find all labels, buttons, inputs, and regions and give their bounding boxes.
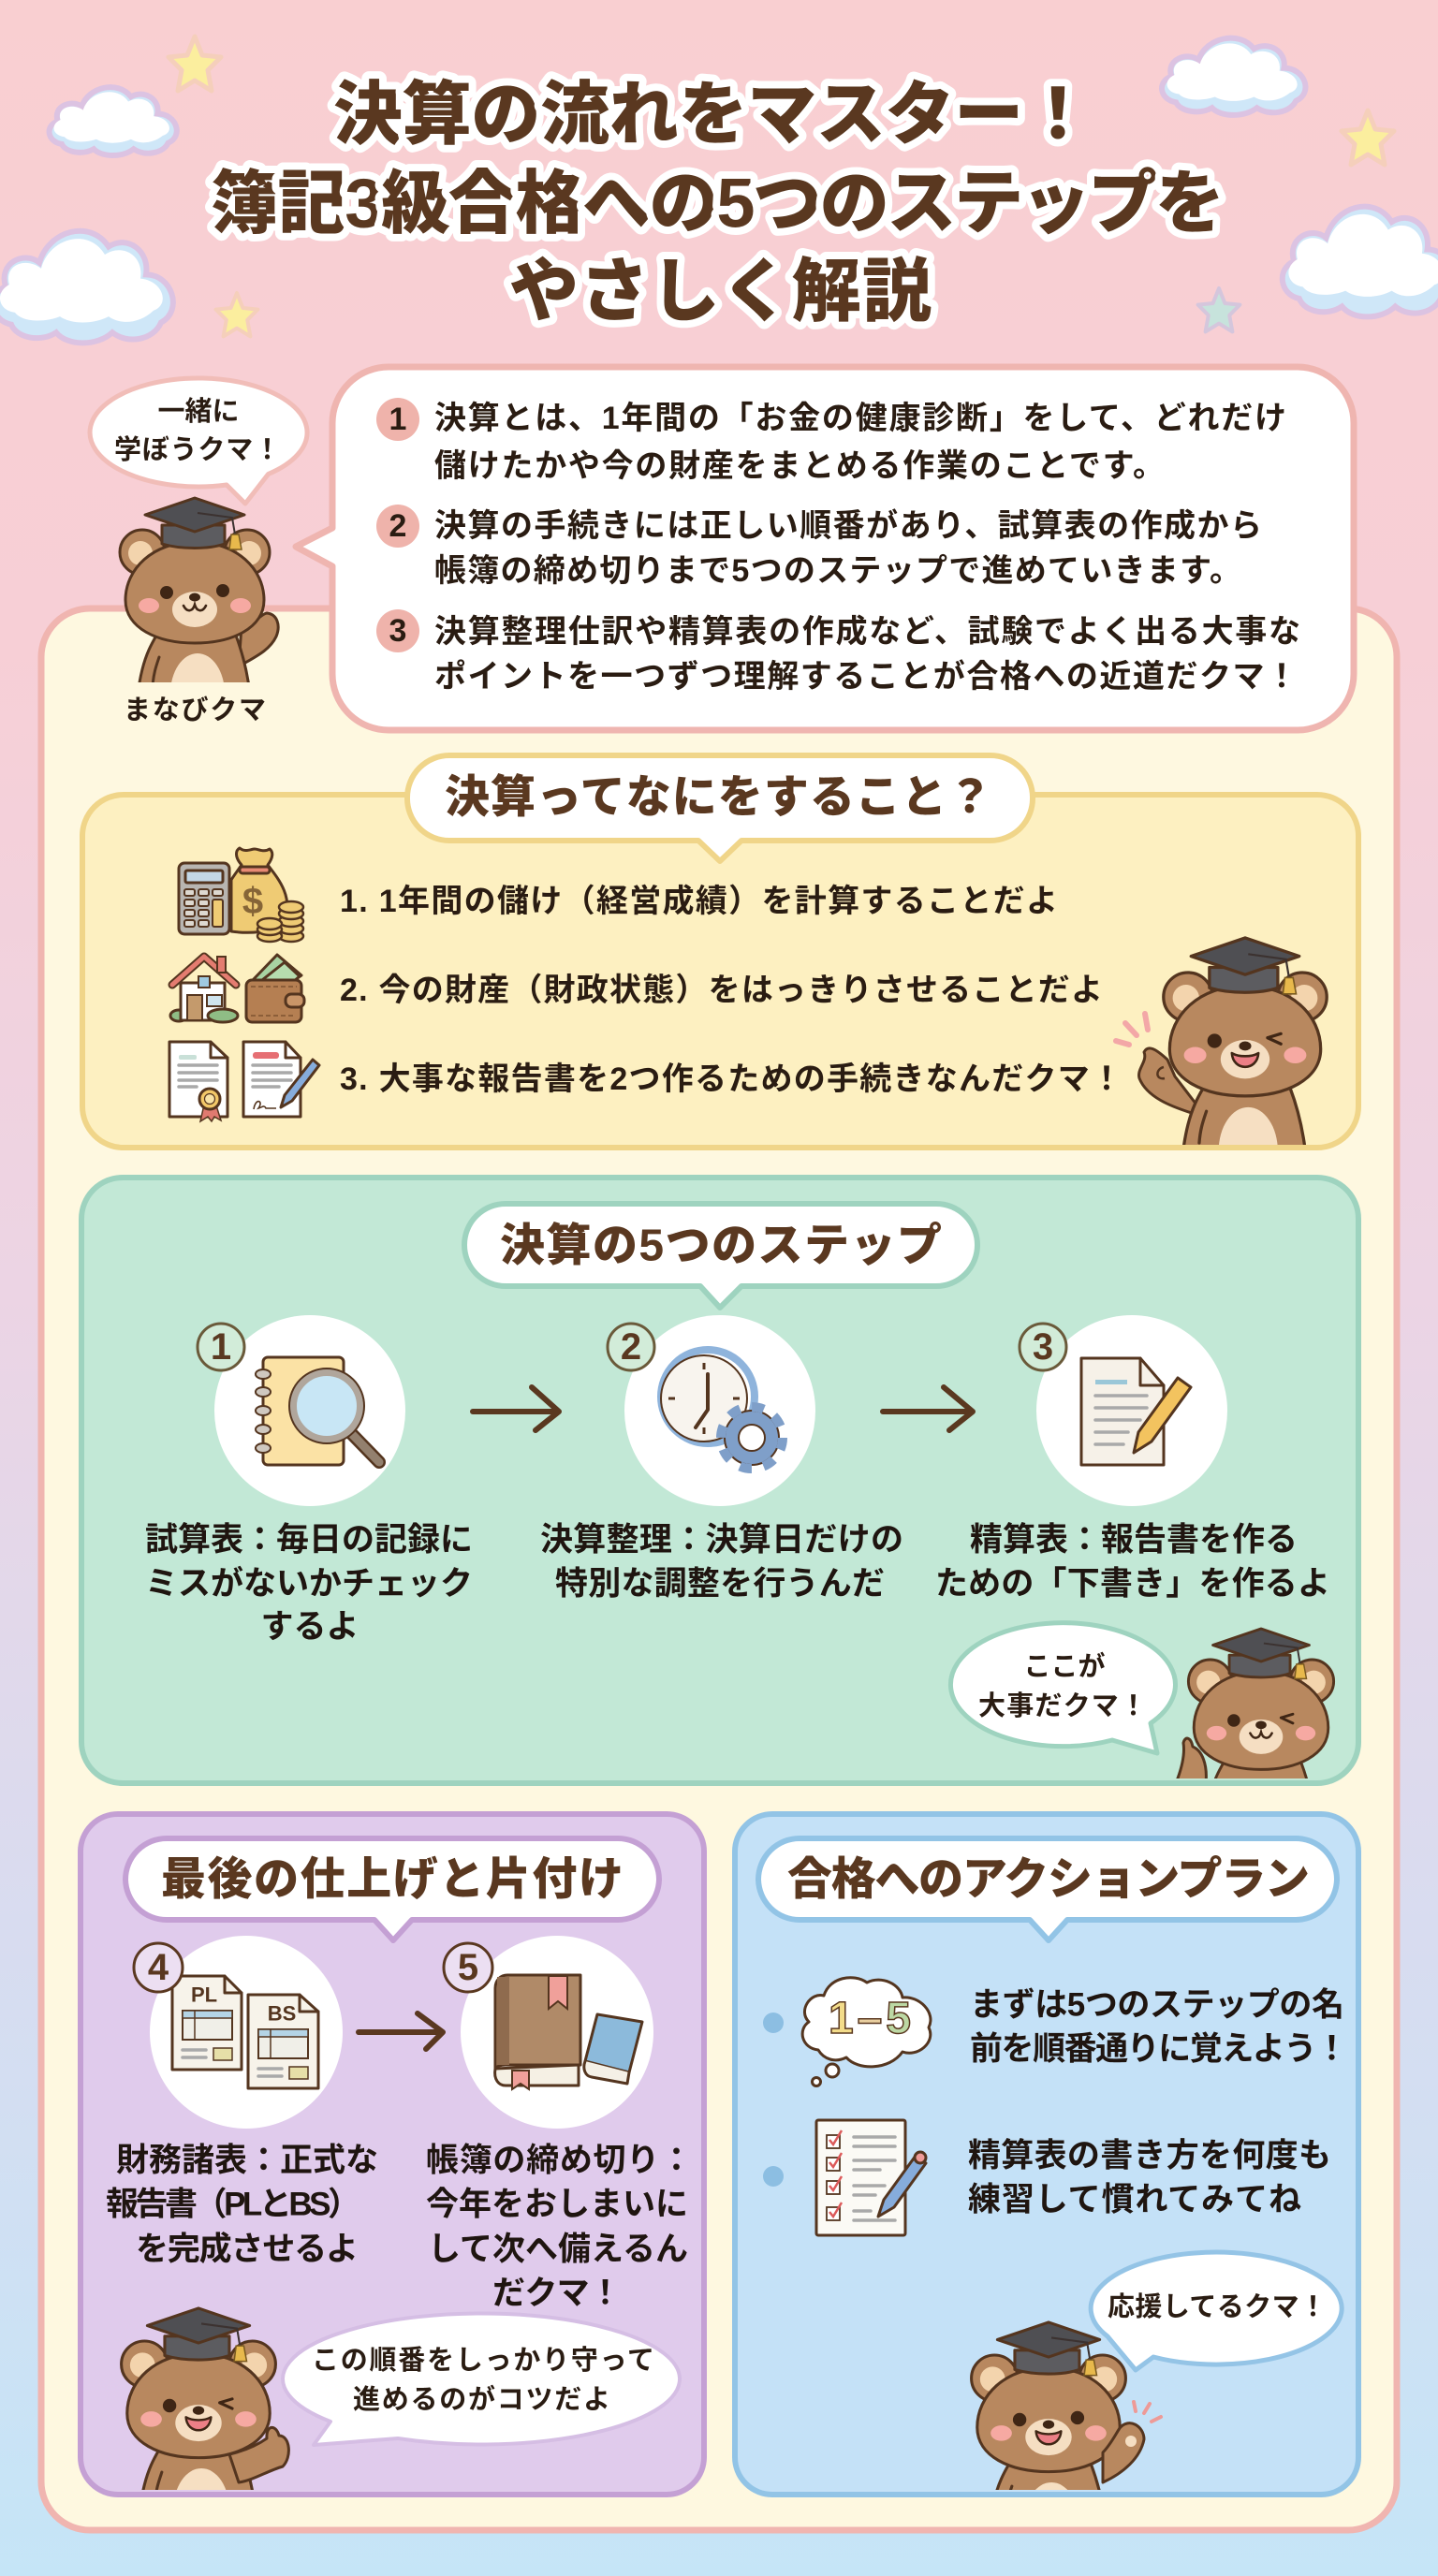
intro point 3: 3 — [389, 613, 406, 649]
item 3: 3. 大事な報告書を2つ作るための手続きなんだクマ！ — [340, 1061, 1123, 1097]
icon: thought cloud 1-5: 1–5 — [829, 1994, 911, 2042]
arrow 4 to 5 — [359, 2013, 443, 2049]
panel: final touches — [81, 1814, 704, 2560]
title: 決算の流れをマスター！ — [333, 75, 1093, 154]
step 3: ための「下書き」を作るよ — [935, 1565, 1330, 1603]
speech bubble: cheering: 応援してるクマ！ — [1108, 2291, 1327, 2322]
speech bubble: follow the order: 進めるのがコツだよ — [353, 2383, 610, 2415]
speech bubble: this is important: 大事だクマ！ — [978, 1690, 1147, 1721]
panel: intro speech bubble — [296, 367, 1354, 730]
icon: PL and BS sheets: PL — [191, 1983, 217, 2007]
icon: clock and gear — [661, 1350, 783, 1469]
icon: two report documents with seal and pen — [169, 1042, 319, 1121]
bear mascot: top, waving — [118, 496, 280, 682]
speech bubble: study together: 一緒に — [157, 396, 240, 427]
step 1: 試算表：毎日の記録に — [145, 1522, 473, 1558]
badge 3: 3 — [1033, 1326, 1053, 1368]
step 5: して次へ備えるん — [428, 2232, 688, 2267]
badge 5: 5 — [458, 1947, 478, 1988]
speech bubble: this is important: ここが — [1023, 1650, 1106, 1682]
heading bubble: 決算の5つのステップ — [500, 1221, 942, 1271]
arrow 1 to 2 — [473, 1387, 559, 1430]
decorative sky: clouds and stars — [0, 37, 1438, 343]
badge 2: 2 — [621, 1326, 641, 1368]
panel: five steps — [79, 1175, 1361, 1786]
badge 4: 4 — [148, 1947, 169, 1988]
icon: calculator, money bag and coins — [179, 848, 303, 942]
icon: checklist and pen — [816, 2120, 926, 2235]
step 1: ミスがないかチェック — [145, 1565, 473, 1603]
bear mascot: pointing, winking — [1113, 936, 1328, 1145]
badge 1: 1 — [211, 1326, 231, 1368]
intro point 2: 2 — [389, 508, 406, 544]
badge 1 — [198, 1324, 244, 1370]
step 3 — [935, 1315, 1330, 1603]
step 3: 精算表：報告書を作る — [970, 1522, 1298, 1558]
step 2: 決算整理：決算日だけの — [540, 1522, 903, 1558]
intro point 1: 1 — [389, 402, 406, 437]
icon: calculator, money bag and coins: $ — [242, 881, 263, 922]
arrow 2 to 3 — [883, 1387, 973, 1430]
title: やさしく解説 — [509, 253, 932, 329]
intro point 1 — [376, 398, 1286, 484]
step 4: を完成させるよ — [136, 2232, 359, 2267]
speech bubble: this is important — [950, 1623, 1175, 1753]
step 5: 今年をおしまいに — [426, 2187, 688, 2222]
badge 2 — [608, 1324, 654, 1370]
panel: what is closing — [80, 753, 1361, 1150]
heading bubble: 最後の仕上げと片付け — [161, 1855, 624, 1904]
intro point 1: 儲けたかや今の財産をまとめる作業のことです。 — [434, 448, 1165, 484]
intro point 3 — [376, 609, 1300, 695]
item 2: 2. 今の財産（財政状態）をはっきりさせることだよ — [340, 973, 1103, 1008]
icon: notebook and magnifier — [256, 1357, 379, 1465]
icon: PL and BS sheets — [172, 1976, 318, 2088]
badge 5 — [444, 1943, 492, 1992]
badge 4 — [134, 1943, 183, 1992]
bear mascot: small, winking — [1176, 1627, 1335, 1778]
panel: action plan: 前を順番通りに覚えよう！ — [970, 2031, 1348, 2067]
icon: document and pencil — [1081, 1358, 1191, 1465]
heading bubble: 決算ってなにをすること？ — [445, 773, 992, 822]
icon: books — [495, 1975, 642, 2089]
speech bubble: follow the order: この順番をしっかり守って — [312, 2345, 654, 2376]
step 4 — [106, 1936, 378, 2267]
speech bubble: study together — [90, 378, 307, 504]
step 5 — [426, 1936, 693, 2312]
step 5: だクマ！ — [492, 2275, 622, 2312]
step 2 — [540, 1315, 903, 1603]
intro point 1: 決算とは、1年間の「お金の健康診断」をして、どれだけ — [434, 401, 1286, 436]
heading bubble — [125, 1838, 659, 1940]
icon: thought cloud 1-5 — [802, 1978, 931, 2086]
step 4: 報告書（PLとBS） — [106, 2187, 360, 2222]
intro point 2: 帳簿の締め切りまで5つのステップで進めていきます。 — [434, 553, 1241, 589]
title: 簿記3級合格への5つのステップを — [211, 165, 1225, 242]
icon: PL and BS sheets: BS — [268, 2001, 296, 2026]
item 1: 1. 1年間の儲け（経営成績）を計算することだよ — [340, 884, 1058, 919]
speech bubble: cheering — [1091, 2252, 1342, 2370]
speech bubble: follow the order — [283, 2313, 680, 2445]
step 2: 特別な調整を行うんだ — [555, 1565, 885, 1603]
panel: main cream card — [41, 608, 1397, 2530]
intro point 2 — [376, 505, 1262, 589]
intro point 3: 決算整理仕訳や精算表の作成など、試験でよく出る大事な — [434, 614, 1300, 650]
title — [211, 75, 1225, 329]
bear mascot: thumbs up — [120, 2306, 290, 2490]
bullet 1 — [763, 2012, 784, 2033]
heading bubble: 合格へのアクションプラン — [787, 1855, 1310, 1904]
sparkle marks — [1134, 2402, 1161, 2422]
speech bubble: study together: 学ぼうクマ！ — [114, 434, 281, 465]
step 4: 財務諸表：正式な — [116, 2142, 378, 2179]
panel: action plan — [735, 1814, 1358, 2574]
bullet 2 — [763, 2166, 784, 2187]
intro point 3: ポイントを一つずつ理解することが合格への近道だクマ！ — [434, 658, 1298, 695]
intro point 2: 決算の手続きには正しい順番があり、試算表の作成から — [434, 507, 1262, 544]
heading bubble — [407, 755, 1033, 861]
icon: house and wallet — [170, 955, 304, 1022]
bear name label: まなびクマ — [124, 695, 266, 725]
badge 3 — [1020, 1324, 1066, 1370]
step 1: するよ — [260, 1608, 360, 1646]
heading bubble — [464, 1204, 977, 1308]
panel: action plan: 精算表の書き方を何度も — [968, 2138, 1331, 2174]
step 5: 帳簿の締め切り： — [426, 2142, 693, 2179]
panel: action plan: 練習して慣れてみてね — [968, 2181, 1301, 2218]
step 1 — [145, 1315, 473, 1646]
bear mascot: waving paw — [970, 2320, 1146, 2490]
heading bubble — [758, 1838, 1337, 1940]
panel: action plan: まずは5つのステップの名 — [970, 1986, 1344, 2024]
